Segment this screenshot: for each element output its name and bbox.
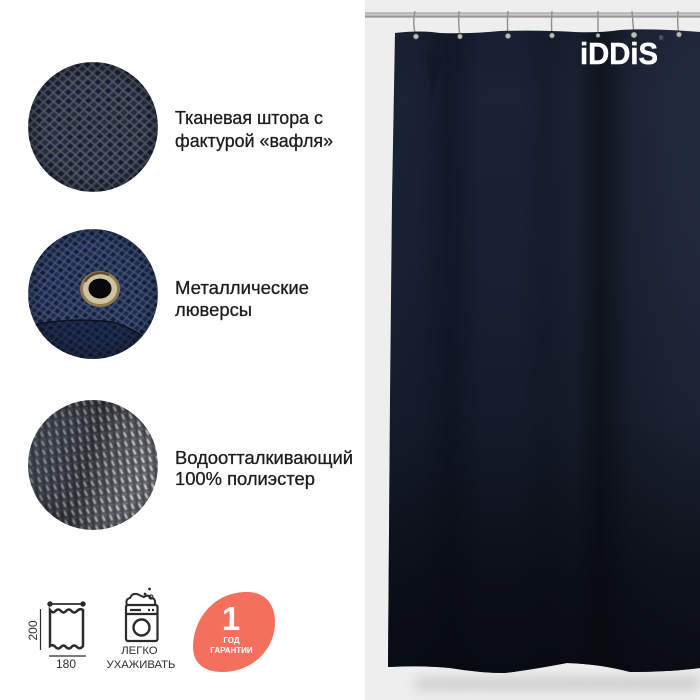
text: waffle fabric: Тканевая штора с [175, 108, 323, 128]
icon: washing machine [126, 588, 158, 641]
badge: 1 year warranty [193, 592, 275, 672]
badge: 1 year warranty: ГАРАНТИИ [210, 646, 253, 655]
dimension labels: 180 [56, 657, 76, 671]
text: waffle fabric: фактурой «вафля» [175, 131, 333, 151]
icon: curtain size: 200 [26, 620, 40, 641]
badge: 1 year warranty: 1 [222, 600, 240, 637]
grommets [413, 32, 682, 39]
floor shadow [415, 676, 700, 690]
grommet [80, 271, 120, 307]
text: water repellent polyester: Водоотталкивающий [175, 448, 353, 468]
image: metal grommet circle [28, 229, 158, 359]
curtain rings [414, 11, 679, 36]
badge: 1 year warranty: ГОД [223, 636, 240, 645]
curtain fabric [388, 29, 700, 673]
text: water repellent polyester: 100% полиэстер [175, 469, 315, 489]
shower rod [365, 12, 700, 18]
curtain outline [50, 609, 83, 648]
image: water repellent circle [28, 400, 158, 530]
logo: IDDIS: iDDiS [580, 36, 658, 71]
logo: IDDIS: ® [659, 35, 664, 42]
rod [50, 603, 83, 605]
panel: curtain photo [365, 0, 700, 700]
image: waffle fabric circle [28, 62, 158, 192]
dimension lines [40, 609, 42, 650]
wall background [365, 0, 700, 700]
text: metal grommets: люверсы [175, 300, 252, 320]
icon: curtain size [26, 601, 86, 671]
text: metal grommets: Металлические [175, 278, 309, 298]
text: easy care: УХАЖИВАТЬ [107, 659, 175, 671]
text: easy care: ЛЕГКО [121, 645, 158, 657]
